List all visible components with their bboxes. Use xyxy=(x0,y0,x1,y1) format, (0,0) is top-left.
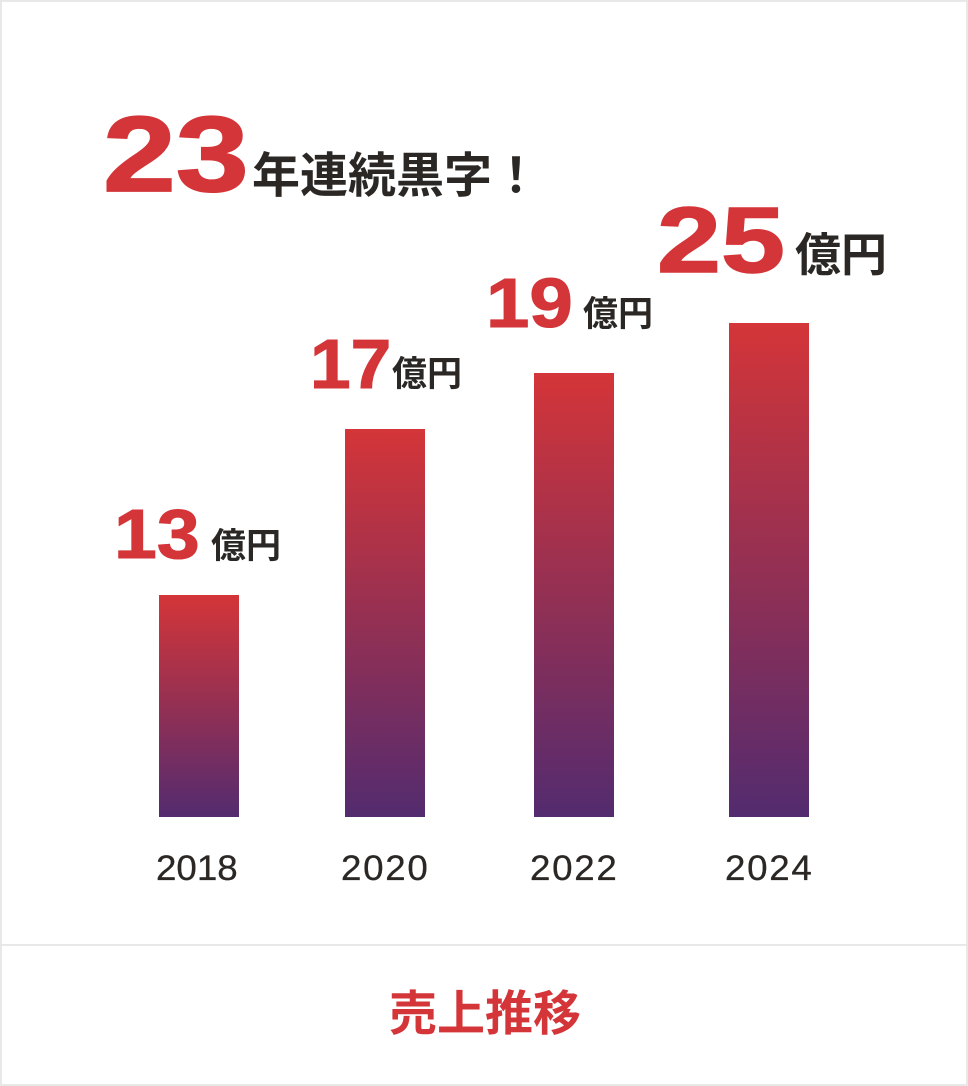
bar: 2024: 億円 xyxy=(795,229,887,281)
headline: 23 years of profit xyxy=(103,95,540,214)
bar: 2024 xyxy=(657,188,887,888)
bar: 2022: 億円 xyxy=(583,295,653,334)
bar chart xyxy=(114,188,887,888)
headline: 23 years of profit: 23 xyxy=(103,95,249,214)
bar: 2020 xyxy=(310,325,462,888)
bar: 2018: 13 xyxy=(114,494,200,573)
bar: 2024: 25 xyxy=(657,188,785,292)
bar: 2018 xyxy=(114,494,281,888)
bar: 2020: 億円 xyxy=(392,355,462,394)
bar: 2022 xyxy=(486,264,653,888)
headline: 23 years of profit: 年連続黒字！ xyxy=(252,150,540,203)
caption: 売上推移 xyxy=(389,988,581,1041)
bar: 2022: 19 xyxy=(486,264,573,342)
bar: 2020: 17 xyxy=(310,325,391,404)
bar: 2022: 2022 xyxy=(530,849,618,888)
bar: 2018: 億円 xyxy=(211,527,281,566)
bar: 2020: 2020 xyxy=(341,849,429,888)
bar: 2018: 2018 xyxy=(156,849,238,888)
bar: 2024: 2024 xyxy=(725,849,813,888)
